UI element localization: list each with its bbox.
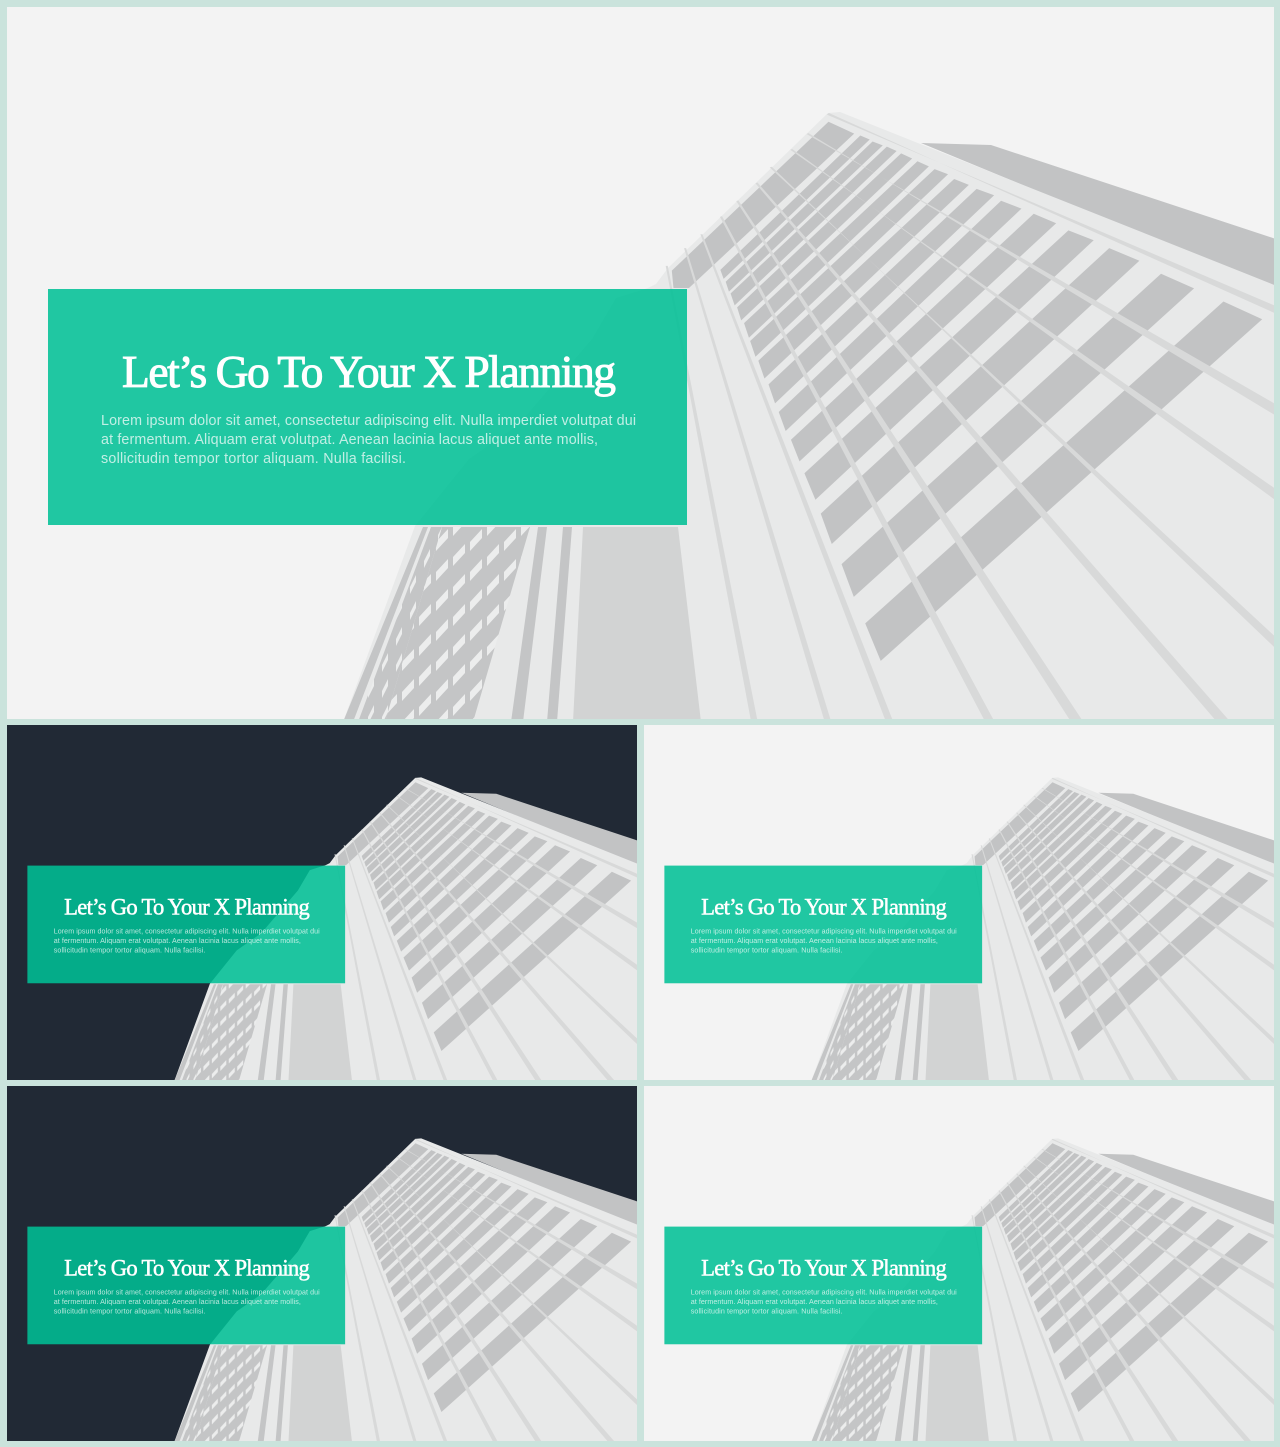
slide background xyxy=(7,1086,637,1441)
body text: Lorem ipsum dolor sit amet, consectetur adipiscing elit. Nulla imperdiet volutpat dui xyxy=(691,927,957,935)
panel: small dark slide, lower left xyxy=(7,1086,637,1441)
title: Let’s Go To Your X Planning xyxy=(64,894,310,919)
body text: at fermentum. Aliquam erat volutpat. Aenean lacinia lacus aliquet ante mollis, xyxy=(691,1298,938,1306)
teal title box xyxy=(664,1227,982,1344)
body text: Lorem ipsum dolor sit amet, consectetur adipiscing elit. Nulla imperdiet volutpat dui xyxy=(54,927,320,935)
slide background xyxy=(644,725,1274,1080)
body text: sollicitudin tempor tortor aliquam. Nulla facilisi. xyxy=(691,946,842,954)
building illustration xyxy=(174,1138,646,1442)
building illustration xyxy=(811,777,1280,1081)
body text xyxy=(54,927,320,954)
panel: large light slide xyxy=(7,7,1274,719)
teal title box xyxy=(48,289,687,525)
body text: Lorem ipsum dolor sit amet, consectetur adipiscing elit. Nulla imperdiet volutpat dui xyxy=(691,1288,957,1296)
body text xyxy=(691,927,957,954)
teal title box xyxy=(27,866,345,983)
body text: Lorem ipsum dolor sit amet, consectetur adipiscing elit. Nulla imperdiet volutpat dui xyxy=(54,1288,320,1296)
body text xyxy=(101,413,636,467)
panel: small light slide, upper right xyxy=(644,725,1274,1080)
body text: sollicitudin tempor tortor aliquam. Nulla facilisi. xyxy=(101,451,406,467)
body text: sollicitudin tempor tortor aliquam. Nulla facilisi. xyxy=(691,1307,842,1315)
title: Let’s Go To Your X Planning xyxy=(701,1255,947,1280)
title: Let’s Go To Your X Planning xyxy=(701,894,947,919)
teal title box xyxy=(27,1227,345,1344)
panel: small light slide, lower right xyxy=(644,1086,1274,1441)
body text: at fermentum. Aliquam erat volutpat. Aenean lacinia lacus aliquet ante mollis, xyxy=(691,937,938,945)
body text: Lorem ipsum dolor sit amet, consectetur adipiscing elit. Nulla imperdiet volutpat dui xyxy=(101,413,636,429)
building illustration xyxy=(174,777,646,1081)
panel: small dark slide, upper left xyxy=(7,725,637,1080)
body text: at fermentum. Aliquam erat volutpat. Aenean lacinia lacus aliquet ante mollis, xyxy=(54,1298,301,1306)
slide background xyxy=(644,1086,1274,1441)
body text xyxy=(691,1288,957,1315)
body text: sollicitudin tempor tortor aliquam. Nulla facilisi. xyxy=(54,1307,205,1315)
body text xyxy=(54,1288,320,1315)
teal title box xyxy=(664,866,982,983)
body text: at fermentum. Aliquam erat volutpat. Aenean lacinia lacus aliquet ante mollis, xyxy=(54,937,301,945)
building illustration xyxy=(343,112,1280,722)
building illustration xyxy=(811,1138,1280,1442)
body text: sollicitudin tempor tortor aliquam. Nulla facilisi. xyxy=(54,946,205,954)
title: Let’s Go To Your X Planning xyxy=(64,1255,310,1280)
slide background xyxy=(7,7,1274,719)
body text: at fermentum. Aliquam erat volutpat. Aenean lacinia lacus aliquet ante mollis, xyxy=(101,432,598,448)
slide background xyxy=(7,725,637,1080)
title: Let’s Go To Your X Planning xyxy=(122,346,616,397)
